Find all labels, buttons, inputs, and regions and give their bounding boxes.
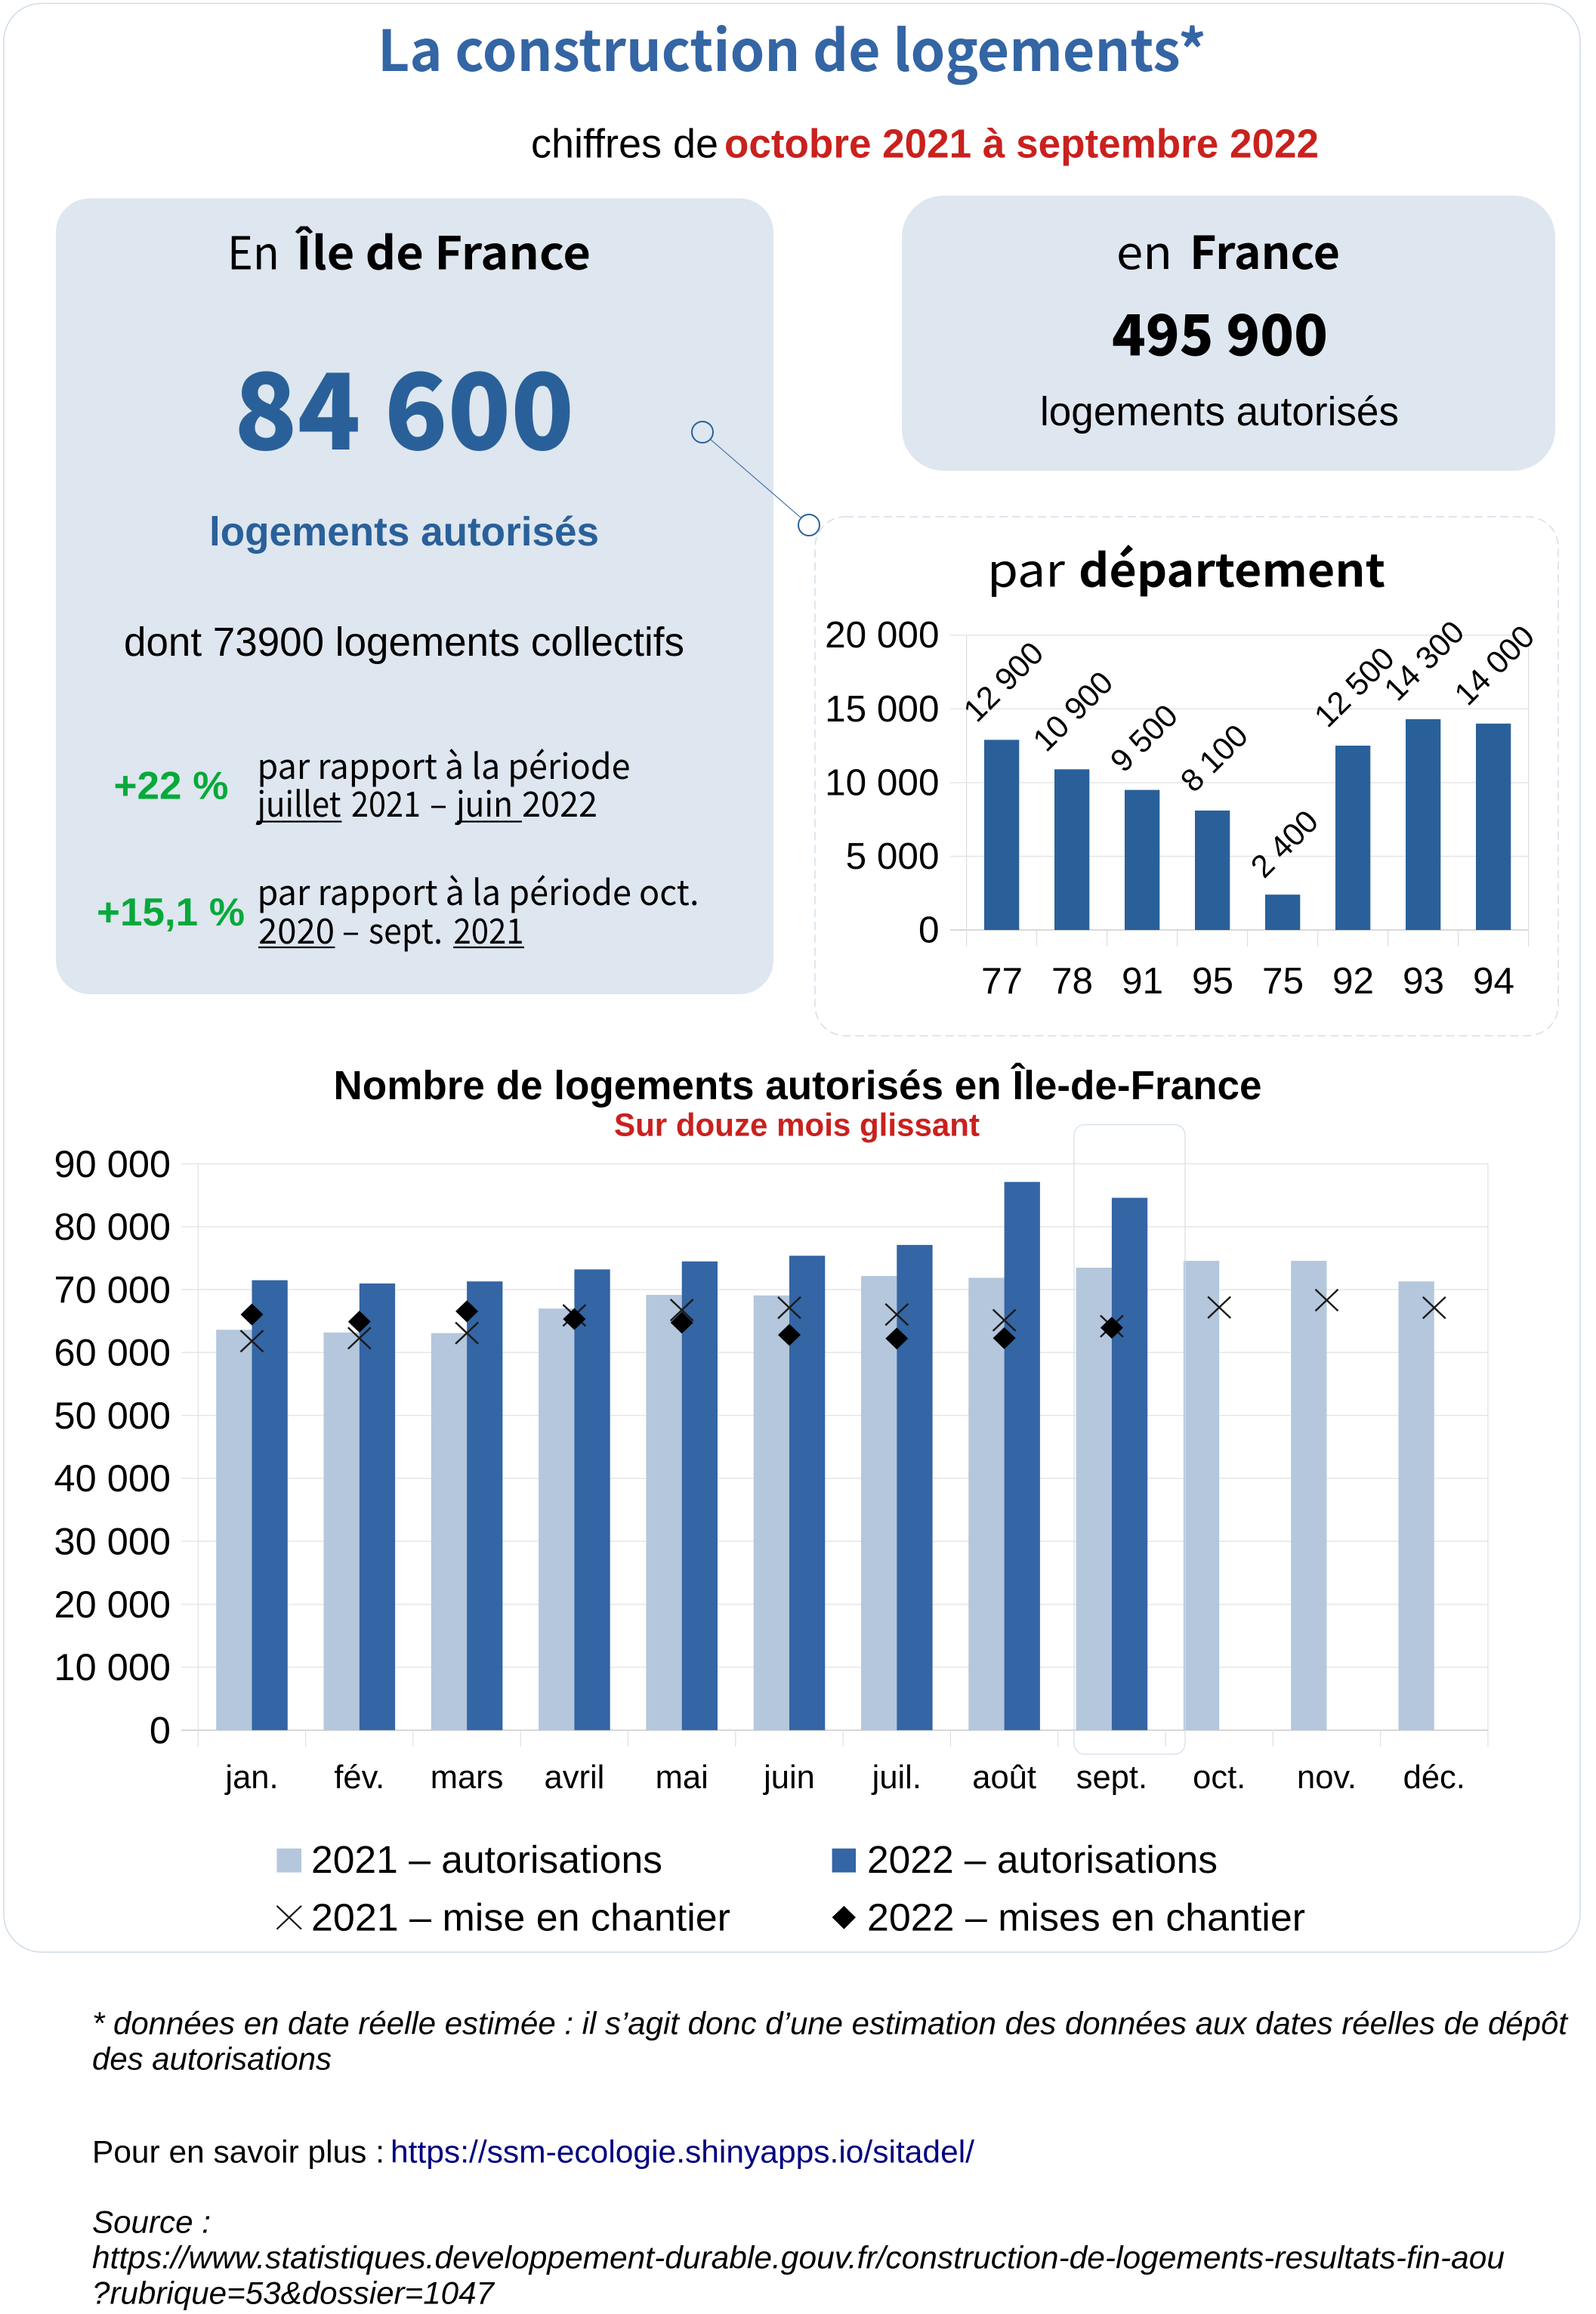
comparison text: juillet 2021 – juin 2022: juillet [255, 777, 341, 827]
comparison text: oct. 2020 – sept. 2021 [257, 866, 699, 954]
comparison text: juillet 2021 – juin 2022: 2021 [351, 777, 421, 827]
comparison text: oct. 2020 – sept. 2021: – [342, 904, 360, 954]
x axis labels [981, 960, 1514, 1002]
x axis labels: juil. [871, 1759, 921, 1796]
data labels: 2 400 [1244, 803, 1325, 885]
label: logements autorisés: logements autorisés [1040, 389, 1399, 434]
x axis labels: août [972, 1759, 1036, 1796]
data labels: 8 100 [1174, 718, 1255, 799]
comparison text: oct. 2020 – sept. 2021: 2021 [453, 904, 524, 954]
comparison text: oct. 2020 – sept. 2021: 2020 [258, 904, 335, 954]
x axis labels: juin [762, 1759, 815, 1796]
y axis labels: 80 000 [54, 1205, 171, 1248]
legend: 2022 autorisations: 2022 – autorisations [867, 1838, 1218, 1881]
y axis labels: 15 000 [825, 688, 940, 730]
panel: par département [815, 517, 1558, 1036]
subtitle: chiffres de [531, 121, 718, 166]
data labels: 10 900 [1026, 664, 1119, 758]
heading: en France: France [1190, 217, 1340, 283]
comparison text: juillet 2021 – juin 2022: par rapport à la période [257, 740, 630, 789]
y axis labels: 10 000 [54, 1645, 171, 1688]
x axis labels: 93 [1403, 960, 1444, 1002]
x axis labels: nov. [1297, 1759, 1357, 1796]
x axis labels: jan. [224, 1759, 279, 1796]
comparison text: juillet 2021 – juin 2022 [255, 740, 630, 827]
stat: +22 %: +22 % [113, 765, 228, 808]
panel: France [902, 196, 1555, 471]
heading: en France [1116, 217, 1340, 283]
y axis labels: 50 000 [54, 1394, 171, 1437]
subheading: Sur douze mois glissant: Sur douze mois glissant [614, 1108, 980, 1144]
legend: 2021 autorisations: 2021 – autorisations [311, 1838, 662, 1881]
y axis labels [825, 614, 940, 950]
source: ?rubrique=53&dossier=1047 [92, 2275, 495, 2310]
subtitle: octobre 2021 à septembre 2022 [724, 121, 1319, 166]
data labels: 14 300 [1377, 613, 1471, 707]
x axis labels: 94 [1473, 960, 1514, 1002]
chart: monthly authorisations and starts [54, 1125, 1488, 1796]
x axis labels [224, 1759, 1465, 1796]
x axis labels: 95 [1192, 960, 1233, 1002]
x axis labels: mars [431, 1759, 503, 1796]
markers: 2021 mise en chantier [240, 1290, 1446, 1352]
y axis labels: 5 000 [846, 836, 940, 877]
y axis labels: 90 000 [54, 1142, 171, 1185]
x axis labels: fév. [334, 1759, 384, 1796]
bars: 2021 autorisations [216, 1261, 1434, 1730]
comparison text: juillet 2021 – juin 2022: – [430, 777, 447, 827]
x axis labels: oct. [1193, 1759, 1246, 1796]
source: https://www.statistiques.developpement-durable.gouv.fr/construction-de-logements-resultats-fin-aou [92, 2239, 1505, 2275]
bar chart: par département [825, 613, 1541, 1002]
y axis labels [54, 1142, 171, 1751]
heading: En Île de France: En [227, 218, 279, 283]
y axis labels: 20 000 [825, 614, 940, 656]
data labels: 14 000 [1447, 618, 1541, 712]
connector between panels [692, 422, 820, 536]
heading: par département: par [987, 535, 1066, 600]
x axis labels: 75 [1262, 960, 1304, 1002]
x axis labels: avril [545, 1759, 604, 1796]
more information link [92, 2133, 974, 2170]
title: La construction de logements* [378, 5, 1206, 88]
data labels: 12 900 [956, 635, 1050, 728]
y axis labels: 30 000 [54, 1520, 171, 1562]
x axis labels: sept. [1076, 1759, 1147, 1796]
x axis labels: mai [656, 1759, 708, 1796]
source: Source : [92, 2204, 211, 2239]
y axis labels: 10 000 [825, 762, 940, 804]
comparison text: oct. 2020 – sept. 2021: par rapport à la période oct. [257, 866, 699, 916]
source [92, 2204, 1505, 2310]
data labels [956, 613, 1541, 885]
big number: 495 900: 495 900 [1112, 290, 1328, 372]
x axis labels: 91 [1122, 960, 1163, 1002]
x axis labels: 77 [981, 960, 1023, 1002]
comparison text: oct. 2020 – sept. 2021: sept. [369, 904, 443, 954]
legend: 2021 mise en chantier: 2021 – mise en chantier [311, 1896, 730, 1939]
x axis labels: déc. [1403, 1759, 1465, 1796]
text: logements collectifs: dont 73900 logements collectifs [124, 619, 684, 665]
more information link: https://ssm-ecologie.shinyapps.io/sitadel/ [391, 2133, 974, 2170]
footnote: des autorisations [92, 2041, 332, 2076]
x axis labels: 78 [1051, 960, 1093, 1002]
comparison text: juillet 2021 – juin 2022: 2022 [522, 777, 597, 827]
y axis labels: 60 000 [54, 1331, 171, 1373]
panel: Île de France [56, 198, 773, 994]
y axis labels: 0 [150, 1709, 171, 1751]
more information link: Pour en savoir plus : [92, 2133, 384, 2170]
footnote: * données en date réelle estimée : il s’agit donc d’une estimation des données aux dates réelles de dépôt [92, 2005, 1569, 2041]
highlight: septembre [1074, 1125, 1185, 1754]
y axis labels: 70 000 [54, 1268, 171, 1311]
bars [984, 719, 1511, 930]
y axis labels: 0 [918, 910, 940, 950]
data labels: 12 500 [1307, 640, 1401, 734]
stat: +15,1 %: +15,1 % [97, 891, 245, 935]
markers: 2022 mises en chantier [240, 1300, 1123, 1349]
heading: En Île de France: Île de France [295, 218, 591, 283]
x axis labels: 92 [1332, 960, 1374, 1002]
legend [276, 1838, 1305, 1939]
heading: en France: en [1116, 217, 1172, 283]
footnote [92, 2005, 1569, 2076]
big number: 84 600: 84 600 [234, 328, 574, 480]
label: logements autorisés: logements autorisés [209, 509, 599, 555]
comparison text: juillet 2021 – juin 2022: juin [454, 777, 513, 827]
heading: par département: département [1079, 535, 1385, 600]
data labels: 9 500 [1104, 697, 1184, 779]
legend: 2022 mises en chantier: 2022 – mises en chantier [867, 1896, 1305, 1939]
bars: 2022 autorisations [252, 1182, 1147, 1730]
heading: Nombre de logements autorisés: Nombre de logements autorisés en Île-de-France [334, 1062, 1261, 1108]
y axis labels: 40 000 [54, 1457, 171, 1500]
y axis labels: 20 000 [54, 1583, 171, 1626]
